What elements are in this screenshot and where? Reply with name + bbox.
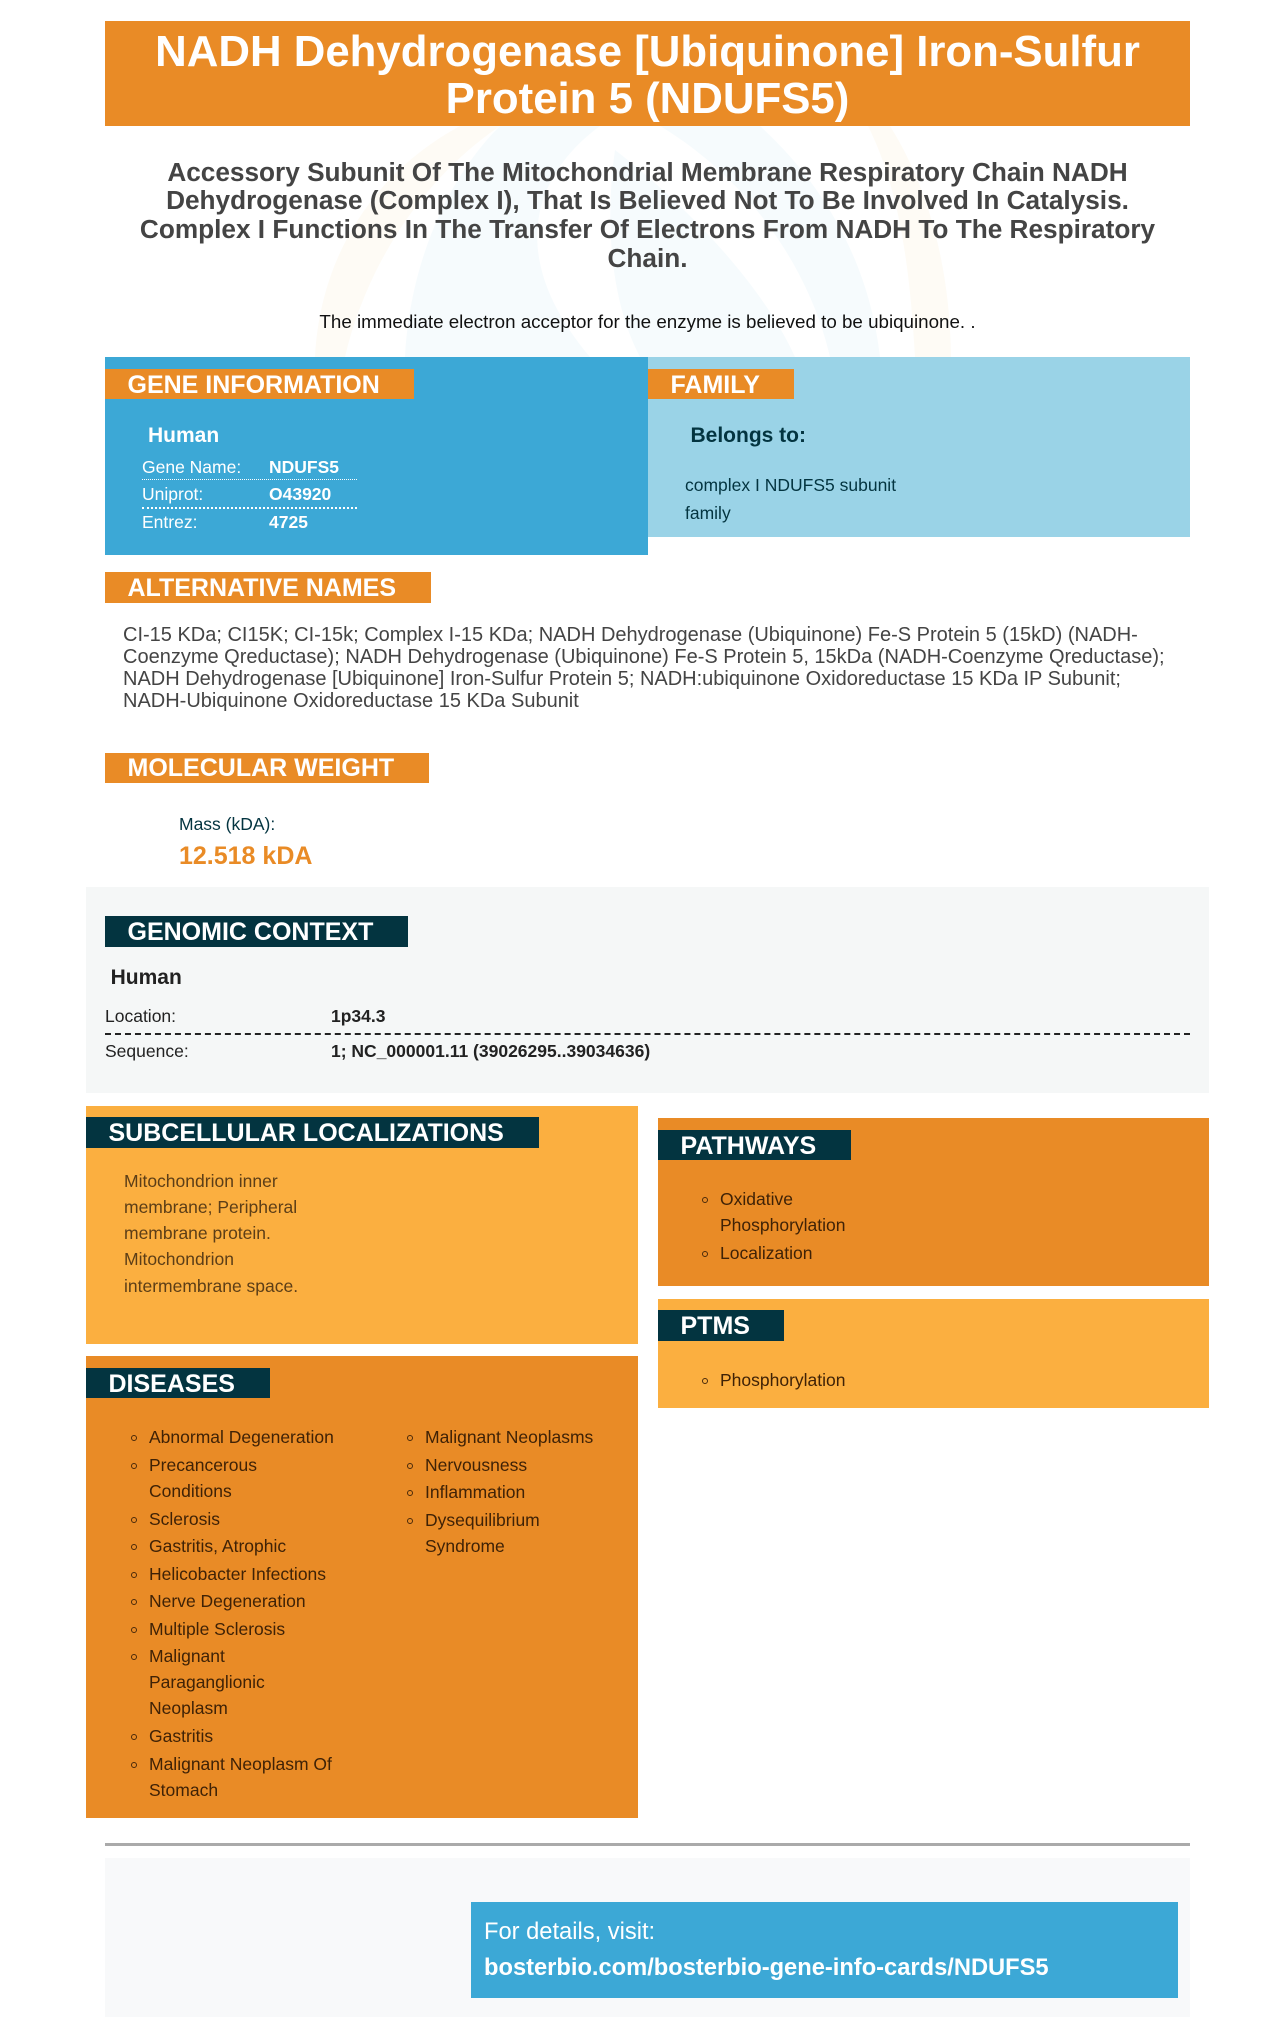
sequence row: Sequence: (105, 1041, 189, 1061)
disease list column 1: Conditions (149, 1481, 232, 1501)
pathway list: Localization (720, 1243, 812, 1263)
disease list column 1: Malignant (149, 1646, 225, 1666)
disease list column 1: Stomach (149, 1780, 218, 1800)
panel: ptms (658, 1299, 1209, 1408)
sequence row: 1; NC_000001.11 (39026295..39034636) (331, 1041, 650, 1061)
gene name row: NDUFS5 (269, 457, 339, 477)
panel: pathways (658, 1118, 1209, 1286)
disease list column 1: Gastritis (149, 1726, 213, 1746)
gene name row: Gene Name: (142, 457, 241, 477)
details link box: bosterbio.com/bosterbio-gene-info-cards/NDUFS5 (484, 1955, 1049, 1981)
title banner: Protein 5 (NDUFS5) (446, 74, 849, 123)
uniprot row: Uniprot: (142, 484, 203, 504)
panel: subcellular localizations (86, 1106, 638, 1344)
uniprot row: O43920 (269, 484, 331, 504)
panel: genomic context (86, 887, 1209, 1093)
alternative names text: NADH Dehydrogenase [Ubiquinone] Iron-Sulfur Protein 5; NADH:ubiquinone Oxidoreductase 15 KDa IP Subunit; (123, 668, 1121, 690)
alternative names text: CI-15 KDa; CI15K; CI-15k; Complex I-15 KDa; NADH Dehydrogenase (Ubiquinone) Fe-S Protein 5 (15kD) (NADH- (123, 624, 1138, 646)
heading: pathways: PATHWAYS (680, 1132, 816, 1160)
heading: ptms (658, 1310, 784, 1341)
heading: diseases (86, 1368, 270, 1398)
localization text: intermembrane space. (124, 1276, 298, 1296)
location row: 1p34.3 (331, 1006, 385, 1026)
title banner (105, 21, 1190, 126)
subtitle description: Accessory Subunit Of The Mitochondrial Membrane Respiratory Chain NADH (167, 157, 1128, 187)
molecular weight value: 12.518 kDA (179, 842, 312, 870)
heading: gene information: GENE INFORMATION (128, 371, 380, 399)
footer panel (105, 1858, 1190, 2017)
family text: family (685, 503, 731, 523)
pathway list: Phosphorylation (720, 1215, 846, 1235)
alternative names text (123, 624, 1165, 712)
disease list column 1: Paraganglionic (149, 1672, 265, 1692)
subtitle description: Dehydrogenase (Complex I), That Is Believed Not To Be Involved In Catalysis. (166, 185, 1129, 215)
disease list column 2: Nervousness (425, 1455, 527, 1475)
disease list column 1: Nerve Degeneration (149, 1591, 306, 1611)
localization text: membrane protein. (124, 1223, 271, 1243)
panel: diseases (86, 1356, 638, 1818)
disease list column 2: Syndrome (425, 1536, 505, 1556)
disease list column 1 (131, 1427, 334, 1800)
alternative names text: NADH-Ubiquinone Oxidoreductase 15 KDa Subunit (123, 690, 579, 712)
disease list column 2: Dysequilibrium (425, 1510, 540, 1530)
heading: diseases: DISEASES (108, 1370, 235, 1398)
localization text: Mitochondrion inner (124, 1171, 278, 1191)
disease list column 1: Malignant Neoplasm Of (149, 1754, 332, 1774)
disease list column 1: Precancerous (149, 1455, 257, 1475)
localization text (124, 1171, 298, 1296)
heading: ptms: PTMS (680, 1312, 750, 1340)
details link box: For details, visit: (484, 1919, 655, 1945)
belongs to label: Belongs to: (690, 424, 806, 447)
molecular weight value (179, 814, 312, 870)
heading: family: FAMILY (670, 371, 760, 399)
heading: alternative names: ALTERNATIVE NAMES (128, 574, 396, 602)
disease list column 1: Gastritis, Atrophic (149, 1536, 286, 1556)
heading: genomic context: GENOMIC CONTEXT (128, 918, 373, 946)
summary sentence: The immediate electron acceptor for the enzyme is believed to be ubiquinone. . (319, 311, 976, 332)
location row (105, 1001, 1190, 1035)
subtitle description: Chain. (607, 243, 688, 273)
details link box (471, 1902, 1178, 1998)
species label: Human (148, 424, 219, 447)
heading: molecular weight: MOLECULAR WEIGHT (128, 754, 394, 782)
localization text: Mitochondrion (124, 1249, 234, 1269)
heading: pathways (658, 1130, 851, 1160)
disease list column 1: Abnormal Degeneration (149, 1427, 334, 1447)
entrez row: Entrez: (142, 512, 197, 532)
title banner: NADH Dehydrogenase [Ubiquinone] Iron-Sulfur (155, 27, 1140, 76)
alternative names text: Coenzyme Qreductase); NADH Dehydrogenase (Ubiquinone) Fe-S Protein 5, 15kDa (NADH-Coenzyme Qreductase); (123, 646, 1165, 668)
uniprot row (142, 479, 357, 509)
sequence row (105, 1041, 650, 1061)
subtitle description: Complex I Functions In The Transfer Of Electrons From NADH To The Respiratory (140, 214, 1155, 244)
entrez row (142, 512, 308, 532)
disease list column 1: Helicobacter Infections (149, 1564, 326, 1584)
disease list column 2 (407, 1427, 593, 1556)
heading: family (648, 369, 794, 399)
disease list column 1: Sclerosis (149, 1509, 220, 1529)
family text: complex I NDUFS5 subunit (685, 475, 896, 495)
species label: Human (111, 966, 182, 989)
disease list column 2: Malignant Neoplasms (425, 1427, 593, 1447)
family text (685, 475, 896, 523)
panel: gene information (105, 357, 648, 555)
panel: family (648, 357, 1190, 537)
pathway list (702, 1189, 846, 1263)
localization text: membrane; Peripheral (124, 1197, 297, 1217)
disease list column 1: Neoplasm (149, 1698, 228, 1718)
gene name row (142, 452, 357, 480)
heading: subcellular localizations: SUBCELLULAR LOCALIZATIONS (108, 1119, 504, 1147)
molecular weight value: Mass (kDA): (179, 814, 275, 834)
disease list column 2: Inflammation (425, 1482, 525, 1502)
disease list column 1: Multiple Sclerosis (149, 1619, 285, 1639)
ptm list: Phosphorylation (720, 1370, 846, 1390)
entrez row: 4725 (269, 512, 308, 532)
location row: Location: (105, 1006, 176, 1026)
pathway list: Oxidative (720, 1189, 793, 1209)
subtitle description (140, 157, 1155, 273)
